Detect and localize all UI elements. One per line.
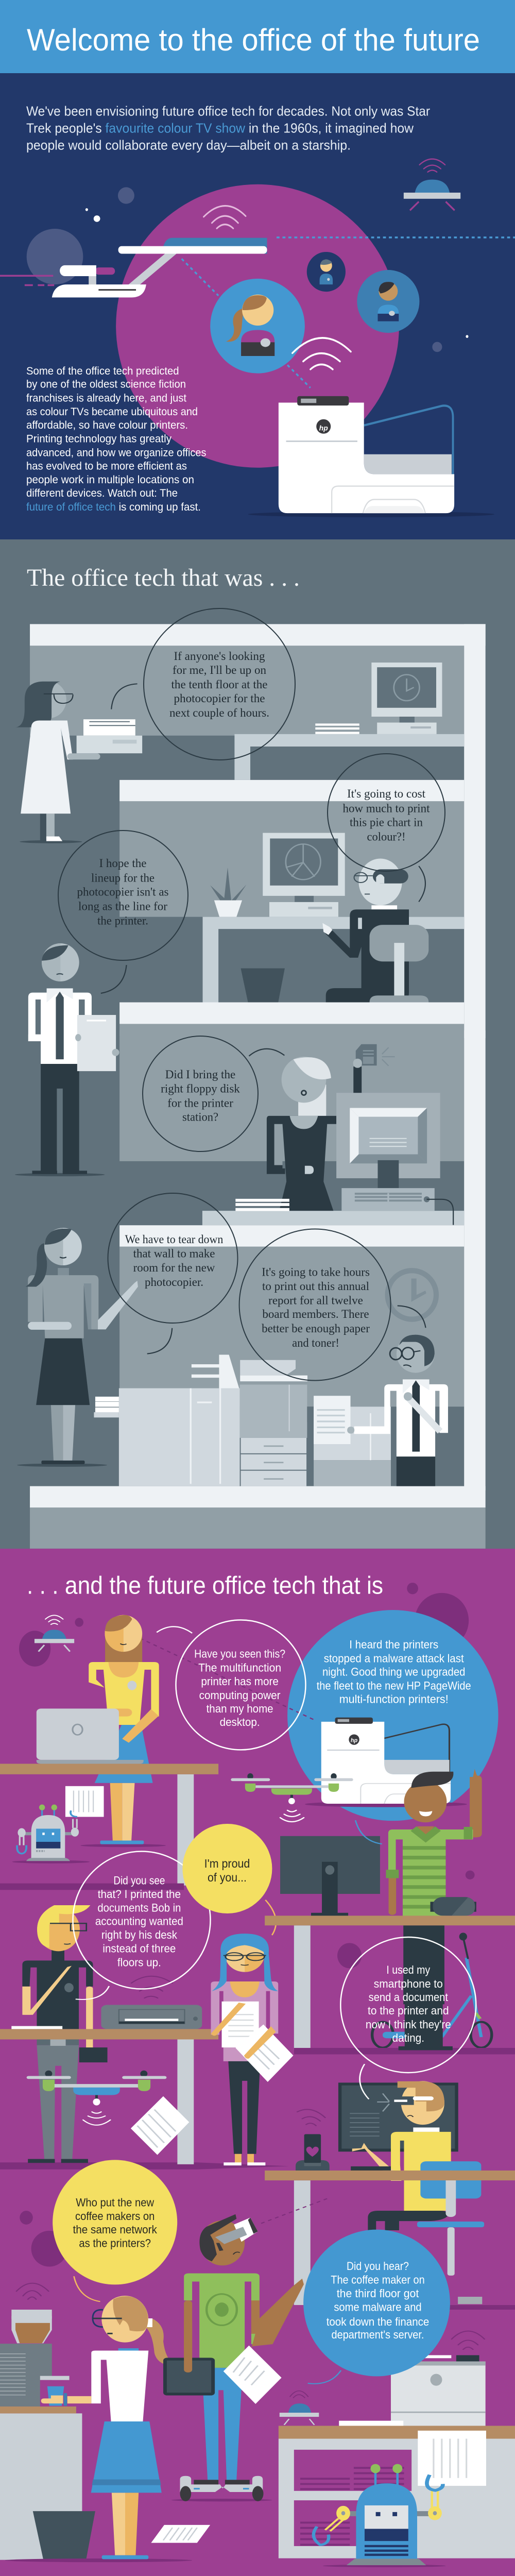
woman with blue hair bbox=[211, 1934, 294, 2165]
speech bubble: pie chart: how much to print bbox=[343, 802, 430, 815]
speech bubble: multifunction printer: Have you seen this? bbox=[194, 1647, 285, 1660]
icon: woman avatar bbox=[210, 279, 305, 374]
speech bubble: tenth floor: for me, I'll be up on bbox=[173, 664, 266, 676]
body paragraph: different devices. Watch out: The bbox=[26, 487, 178, 499]
speech tail bbox=[360, 2064, 369, 2099]
large purple planet bbox=[116, 184, 399, 468]
body paragraph: by one of the oldest science fiction bbox=[26, 379, 186, 391]
woman pointing at wall bbox=[17, 1228, 172, 1467]
blue bubble: coffee maker bbox=[303, 2230, 450, 2376]
woman with laptop bbox=[37, 1615, 166, 1847]
scooter handle bbox=[459, 1933, 468, 1959]
head of man in black bbox=[37, 1905, 90, 1951]
icon: satellite bbox=[404, 159, 460, 210]
speech bubble: pie chart: colour?! bbox=[367, 831, 406, 843]
paper on floor bbox=[151, 2525, 210, 2543]
text: malware bubble copy: stopped a malware attack last bbox=[324, 1652, 464, 1665]
text: malware bubble copy bbox=[317, 1638, 471, 1706]
blue bubble: coffee maker: Did you hear? bbox=[347, 2260, 409, 2273]
icon: computer with clock bbox=[315, 663, 442, 734]
body paragraph: affordable, so have colour printers. bbox=[26, 419, 188, 431]
illustration: space scene bbox=[0, 159, 515, 517]
blue bubble: coffee maker: the third floor got bbox=[337, 2287, 419, 2300]
icon: wifi above printer bbox=[293, 338, 351, 369]
small gray box bbox=[458, 2297, 482, 2304]
speech bubble: smartphone: now I think they're bbox=[366, 2018, 451, 2031]
body paragraph: Some of the office tech predicted bbox=[26, 365, 179, 377]
speech bubble: lineup bbox=[58, 831, 188, 960]
icon: faint wifi bbox=[452, 2331, 485, 2349]
speech bubble: tear down wall bbox=[108, 1193, 238, 1323]
man on hoverboard bbox=[184, 2214, 304, 2480]
lower blobs and wifi bbox=[16, 2211, 67, 2299]
tablet bbox=[163, 2318, 215, 2396]
icon: blue robot bbox=[314, 2464, 445, 2567]
speech bubble: three floors up bbox=[73, 1852, 210, 1989]
speech bubble: lineup: photocopier isn't as bbox=[77, 885, 169, 898]
panel: intro section bbox=[0, 0, 515, 539]
blue bubble: coffee maker: The coffee maker on bbox=[331, 2274, 425, 2286]
icon: small avatar bbox=[307, 252, 346, 292]
lower left office scene bbox=[0, 1905, 515, 2480]
speech bubble: tear down wall: photocopier. bbox=[145, 1276, 203, 1289]
yellow bubble: coffee makers bbox=[53, 2160, 177, 2284]
blue bubble: coffee maker: some malware and bbox=[334, 2301, 422, 2314]
paper on desk bbox=[11, 2026, 62, 2029]
blue bubble background bbox=[287, 1610, 499, 1821]
speech bubble: tenth floor: the tenth floor at the bbox=[171, 678, 268, 691]
speech bubble: three floors up: accounting wanted bbox=[95, 1915, 183, 1928]
icon: coffee machine bbox=[0, 2316, 70, 2406]
icon: printer: hp bbox=[319, 423, 328, 432]
paper page bbox=[418, 2431, 486, 2486]
office building upper floors bbox=[30, 624, 486, 1038]
icon: vr goggles bbox=[431, 1897, 476, 1916]
speech bubble: smartphone: to the printer and bbox=[368, 2004, 449, 2017]
speech bubble: multifunction printer: than my home bbox=[207, 1702, 273, 1715]
icon: old monitor and base bbox=[336, 1093, 453, 1225]
speech bubble: multifunction printer: printer has more bbox=[201, 1675, 279, 1688]
panel: the office tech that was bbox=[0, 539, 515, 1549]
body paragraph: advanced, and how we organize offices bbox=[26, 447, 206, 459]
icon: hoverboard bbox=[171, 2476, 272, 2501]
body paragraph bbox=[26, 365, 206, 513]
speech tail: blue bubble bbox=[355, 1820, 382, 1844]
speech bubble: three floors up: right by his desk bbox=[101, 1928, 178, 1941]
speech bubble: multifunction printer: The multifunction bbox=[198, 1661, 281, 1674]
speech bubble: smartphone: smartphone to bbox=[374, 1977, 443, 1990]
speech bubble: annual report: It's going to take hours bbox=[262, 1265, 370, 1278]
man at desk with pie chart monitor bbox=[210, 833, 428, 1003]
text: malware bubble copy: I heard the printers bbox=[349, 1638, 438, 1651]
flying paper bbox=[131, 2096, 189, 2155]
icon: small satellite lower bbox=[280, 2391, 319, 2425]
speech bubble: smartphone bbox=[340, 1937, 476, 2073]
blue bubble: coffee maker: department's server. bbox=[332, 2328, 424, 2341]
text: malware bubble copy: night. Good thing we upgraded bbox=[322, 1665, 465, 1679]
speech bubble: pie chart: this pie chart in bbox=[350, 816, 423, 828]
speech bubble: multifunction printer bbox=[176, 1620, 306, 1750]
intro text: We've been envisioning future office tech for decades. Not only was Star bbox=[26, 103, 430, 118]
title: Welcome to the office of the future bbox=[27, 23, 480, 57]
icon: starship bbox=[0, 238, 267, 297]
icon: inkjet printer bbox=[101, 2005, 202, 2029]
dashed line bbox=[261, 2198, 329, 2224]
speech bubble: tear down wall: room for the new bbox=[133, 1261, 215, 1274]
monitor on desk bbox=[280, 1836, 380, 1916]
man in green waving bbox=[386, 1769, 482, 2004]
speech bubble: annual report: board members. There bbox=[262, 1308, 369, 1320]
blue bubble: coffee maker: took down the finance bbox=[327, 2315, 429, 2328]
speech tail: white bubble bbox=[157, 1626, 192, 1633]
speech bubble: tenth floor bbox=[144, 608, 295, 760]
speech bubble: lineup: lineup for the bbox=[91, 871, 154, 884]
speech bubble: annual report bbox=[239, 1229, 391, 1381]
speech bubble: smartphone: send a document bbox=[369, 1991, 448, 2004]
speech bubble: floppy disk: right floppy disk bbox=[161, 1082, 240, 1095]
desk bbox=[0, 2029, 218, 2039]
intro text: people would collaborate every day—albeit on a starship. bbox=[26, 137, 351, 152]
man in black bbox=[22, 1948, 109, 2163]
desk: floor one bbox=[234, 734, 464, 780]
speech bubble: multifunction printer: computing power bbox=[199, 1689, 281, 1702]
faint planets and stars bbox=[27, 187, 469, 352]
speech bubble: annual report: report for all twelve bbox=[268, 1294, 363, 1307]
yellow bubble: proud of you: I'm proud bbox=[204, 1857, 250, 1870]
desk right bbox=[265, 1916, 515, 2050]
speech tail: yellow bubble bbox=[265, 1900, 276, 1935]
yellow bubble: coffee makers: coffee makers on bbox=[75, 2210, 154, 2223]
speech tail coffee bbox=[74, 2276, 100, 2301]
dotted signal lines bbox=[182, 238, 515, 388]
desk upper left bbox=[0, 1774, 194, 1890]
body paragraph: has evolved to be more efficient as bbox=[26, 460, 187, 472]
yellow bubble: proud of you bbox=[182, 1824, 272, 1913]
speech bubble: three floors up: Did you see bbox=[113, 1874, 165, 1887]
speech bubble: lineup: I hope the bbox=[99, 857, 146, 870]
speech bubble: floppy disk: Did I bring the bbox=[165, 1068, 235, 1081]
yellow bubble: proud of you: of you... bbox=[208, 1871, 247, 1884]
intro text: Trek people's favourite colour TV show in the 1960s, it imagined how bbox=[26, 121, 414, 136]
speech bubble: annual report: better be enough paper bbox=[262, 1322, 370, 1335]
head of woman with coffee bbox=[93, 2296, 148, 2343]
speech bubble: annual report: to print out this annual bbox=[262, 1280, 369, 1293]
text: malware bubble copy: multi-function printers! bbox=[339, 1693, 449, 1706]
speech bubble: smartphone: dating. bbox=[392, 2031, 424, 2044]
seated man at computer bbox=[338, 2081, 484, 2276]
icon: printer in bubble bbox=[305, 1718, 467, 1807]
floor shadow bbox=[5, 2558, 192, 2562]
icon: wall clock bbox=[388, 1270, 436, 1319]
icon: small satellite bbox=[35, 1615, 74, 1652]
blue bubble tail bbox=[308, 2370, 341, 2384]
speech bubble: smartphone: I used my bbox=[386, 1963, 430, 1976]
yellow bubble: coffee makers: Who put the new bbox=[76, 2196, 154, 2209]
woman with coffee bbox=[41, 2318, 177, 2559]
woman at printer station bbox=[235, 1044, 453, 1225]
speech bubble: tear down wall: that wall to make bbox=[133, 1247, 215, 1260]
counter right bbox=[279, 2426, 515, 2558]
icon: photocopier bbox=[94, 1355, 391, 1486]
speech bubble: three floors up: floors up. bbox=[117, 1956, 161, 1969]
speech bubble: floppy disk: for the printer bbox=[167, 1097, 233, 1110]
body paragraph: franchises is already here, and just bbox=[26, 392, 186, 404]
speech bubble: tear down wall: We have to tear down bbox=[125, 1233, 224, 1246]
paper held bbox=[224, 2346, 282, 2404]
icon: printer in bubble: hp bbox=[351, 1738, 358, 1744]
bottom office scene bbox=[0, 2316, 515, 2567]
icon: drone with signal bbox=[231, 1773, 353, 1822]
speech bubble: lineup: long as the line for bbox=[78, 900, 167, 912]
icon: wifi above ship bbox=[203, 206, 246, 228]
scooter bbox=[372, 1958, 492, 2048]
desk top left bbox=[0, 1764, 218, 1774]
icon: lower drone bbox=[27, 2071, 166, 2125]
icon: large printer on counter bbox=[339, 2355, 486, 2426]
scene: floor one bbox=[15, 663, 442, 1003]
faint wifi bbox=[131, 1976, 173, 1998]
speech bubble: pie chart: It's going to cost bbox=[347, 787, 426, 800]
speech bubble: floppy disk: station? bbox=[182, 1110, 218, 1123]
coffee machine top bbox=[11, 2310, 52, 2319]
body paragraph: as colour TVs became ubiquitous and bbox=[26, 406, 198, 418]
office building lower floors bbox=[30, 1030, 486, 1549]
trousers of green man and floor strip bbox=[294, 1958, 515, 2054]
paper and small robot bbox=[12, 1786, 104, 1863]
counter bbox=[0, 2406, 95, 2560]
woman with box bbox=[15, 682, 142, 843]
speech bubble: tenth floor: photocopier for the bbox=[174, 692, 265, 705]
speech bubble: lineup: the printer. bbox=[97, 914, 148, 927]
speech bubble: three floors up: that? I printed the bbox=[98, 1888, 181, 1901]
speech bubble: three floors up: documents Bob in bbox=[97, 1902, 181, 1914]
floor strip bbox=[0, 2162, 289, 2170]
speech bubble: tenth floor: next couple of hours. bbox=[169, 706, 269, 719]
glasses man bbox=[347, 1306, 448, 1486]
icon: printer bbox=[248, 396, 494, 517]
body paragraph: Printing technology has greatly bbox=[26, 433, 171, 445]
body paragraph: future of office tech is coming up fast. bbox=[26, 501, 201, 513]
panel: future office tech bbox=[0, 1549, 515, 2576]
desk leg bbox=[177, 2039, 194, 2164]
speech bubble: pie chart bbox=[328, 754, 445, 871]
desk right lower bbox=[265, 2171, 515, 2310]
text: malware bubble copy: the fleet to the new HP PageWide bbox=[317, 1680, 471, 1692]
speech bubble: three floors up: instead of three bbox=[102, 1942, 176, 1955]
speech bubble: annual report: and toner! bbox=[292, 1336, 339, 1349]
background blobs and upper floor scene bbox=[0, 1583, 515, 2050]
intro text bbox=[26, 103, 430, 152]
icon: medium avatar bbox=[357, 270, 419, 333]
body paragraph: people work in multiple locations on bbox=[26, 474, 194, 486]
yellow bubble: coffee makers: as the printers? bbox=[79, 2237, 151, 2250]
icon: phone on dock bbox=[296, 2109, 330, 2171]
man with paper bbox=[15, 943, 127, 1176]
desk: floor two bbox=[203, 917, 464, 1003]
speech bubble: tenth floor: If anyone's looking bbox=[174, 650, 265, 663]
dashed signal line bbox=[133, 1635, 315, 1720]
copier and man bbox=[94, 1270, 448, 1486]
speech bubble: floppy disk bbox=[143, 1036, 258, 1151]
heading: . . . and the future office tech that is bbox=[27, 1572, 383, 1599]
yellow bubble: coffee makers: the same network bbox=[73, 2223, 158, 2236]
heading: The office tech that was . . . bbox=[27, 564, 300, 591]
speech bubble: multifunction printer: desktop. bbox=[220, 1716, 260, 1728]
title banner bbox=[0, 0, 515, 73]
